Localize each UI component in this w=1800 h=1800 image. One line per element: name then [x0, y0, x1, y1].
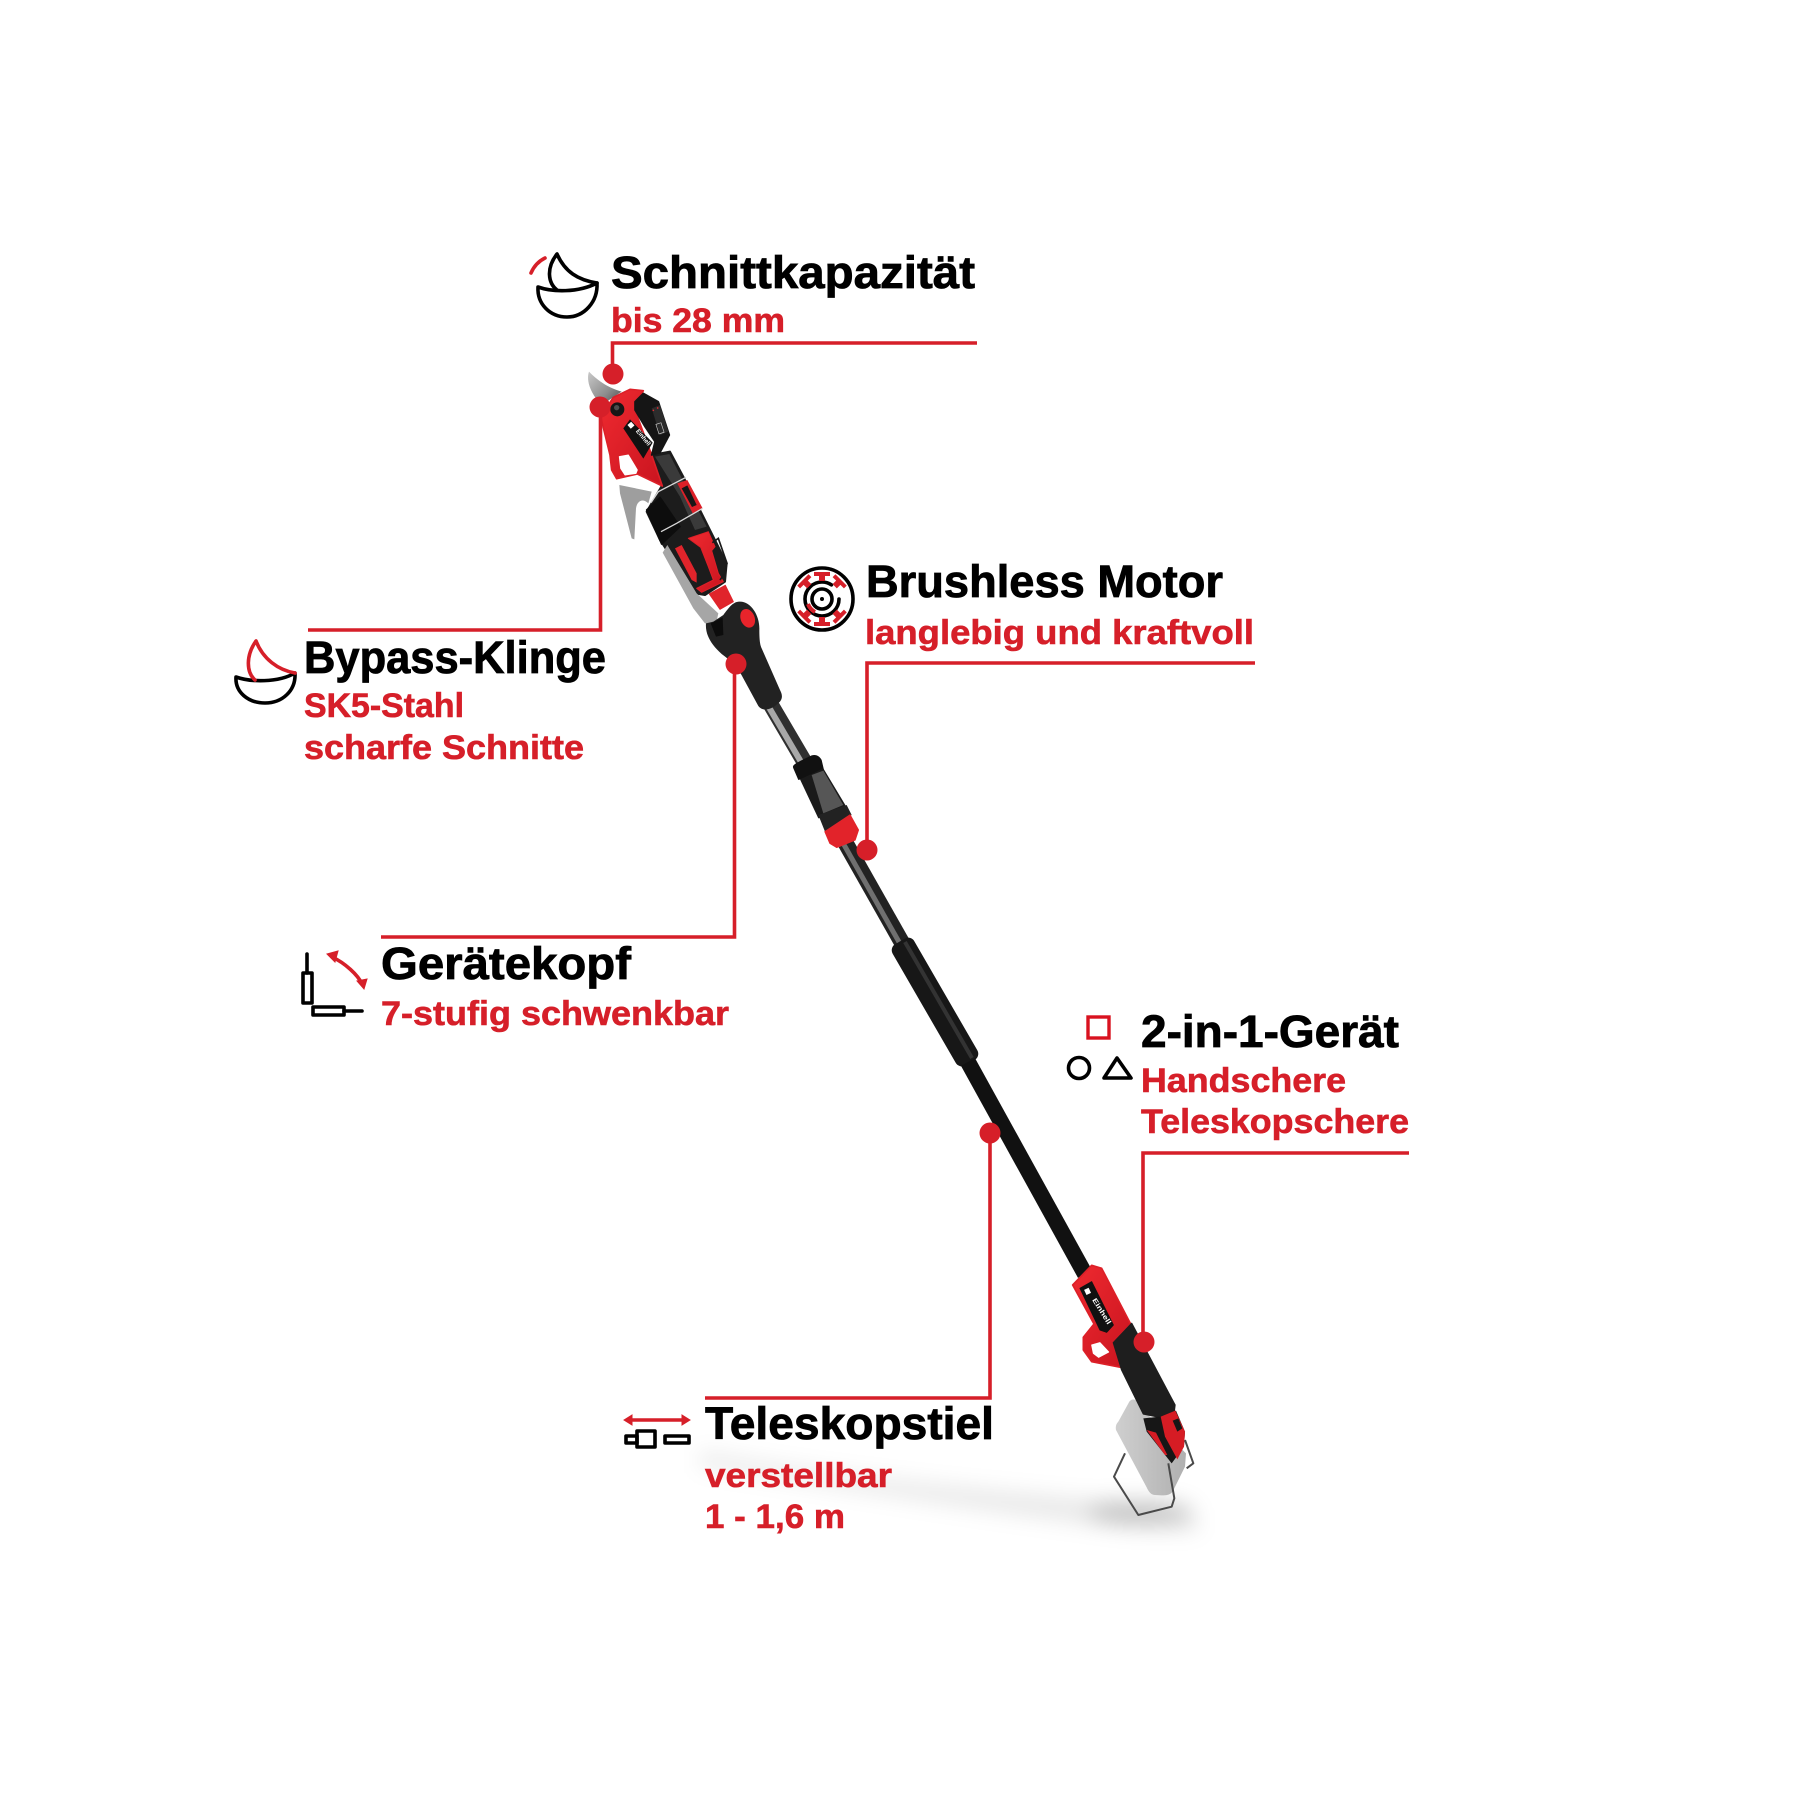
leader line: [381, 664, 734, 937]
handle opening: [1092, 1343, 1109, 1357]
heading: 2-in-1-Gerät: [1141, 1006, 1399, 1057]
subheading: langlebig und kraftvoll: [865, 614, 1254, 652]
ground shadow: [700, 1452, 1200, 1531]
handle unit: [1073, 1265, 1193, 1515]
callout: Brushless Motor: [791, 556, 1255, 860]
marker: [856, 840, 878, 860]
red stripe: [675, 545, 697, 583]
red connector: [709, 585, 733, 609]
red housing: [601, 389, 662, 486]
small display: [1173, 1418, 1182, 1432]
marker: [726, 654, 746, 674]
telescope collar cap: [793, 755, 824, 780]
rubber grip: [1113, 1323, 1175, 1417]
lower black band: [647, 497, 680, 544]
pivot bolt: [610, 402, 624, 416]
marker: [602, 364, 624, 384]
swivel joint: [706, 602, 782, 709]
knurled grip: [812, 771, 843, 813]
heading: Schnittkapazität: [611, 247, 975, 298]
leader line: [867, 663, 1255, 850]
logo panel: Einhell: [634, 428, 652, 448]
heading: Bypass-Klinge: [304, 632, 606, 683]
red lower housing: [688, 532, 723, 592]
callout: Gerätekopf: [303, 654, 746, 1033]
icon: bypass blade: [236, 641, 295, 703]
callout: Schnittkapazität: [531, 247, 977, 384]
hook blade: [619, 485, 652, 539]
blade: [588, 372, 622, 405]
icon: telescopic length: [624, 1415, 690, 1447]
wire stand: [1114, 1440, 1193, 1515]
display: [652, 405, 668, 435]
collar body: [800, 768, 848, 818]
icon: shapes: [1068, 1017, 1131, 1078]
telescopic pole lower section: [968, 1062, 1085, 1274]
collar base: [818, 805, 852, 832]
red handle housing: [1073, 1265, 1131, 1367]
subheading line 1: verstellbar: [705, 1457, 892, 1495]
subheading: 7-stufig schwenkbar: [381, 995, 729, 1033]
product: telescopic pruning shears: [588, 372, 1193, 1515]
callout: Bypass-Klinge: [236, 396, 610, 767]
heading: Brushless Motor: [866, 556, 1223, 607]
callout: Teleskopstiel: [624, 1122, 1000, 1536]
subheading: bis 28 mm: [611, 302, 785, 340]
side clip: [712, 538, 727, 580]
top control panel: [635, 393, 669, 455]
logo panel: [623, 419, 653, 459]
red locking ring: [825, 815, 858, 847]
joint shading: [711, 617, 723, 637]
lower handle logo panel: Einhell: [1090, 1297, 1112, 1326]
subheading line 2: scharfe Schnitte: [304, 729, 584, 767]
subheading line 2: 1 - 1,6 m: [705, 1498, 845, 1536]
heading: Gerätekopf: [381, 938, 632, 989]
leader line: [705, 1133, 990, 1398]
swivel joint and collar: [706, 602, 858, 847]
battery pack: [1116, 1399, 1186, 1495]
black socket base: [1143, 1411, 1185, 1463]
grey holster: [663, 545, 718, 624]
icon: motor: [791, 568, 853, 630]
telescopic pole upper section: [768, 705, 905, 949]
icon: swivel head: [303, 951, 367, 1015]
marker: [590, 396, 610, 418]
subheading line 1: Handschere: [1141, 1062, 1346, 1100]
marker: [980, 1122, 1000, 1144]
heading: Teleskopstiel: [705, 1398, 994, 1449]
socket red stripe: [1147, 1430, 1167, 1455]
trigger opening: [619, 455, 637, 475]
subheading line 1: SK5-Stahl: [304, 687, 464, 725]
red battery mount: [1161, 1411, 1185, 1459]
black grip and lower body: [647, 452, 727, 595]
foam sleeve: [889, 935, 981, 1069]
pruning head: [588, 372, 733, 624]
icon: cutting capacity: [531, 254, 597, 317]
leader line: [308, 407, 600, 630]
lower handle logo panel: [1080, 1282, 1113, 1332]
release button: [738, 607, 758, 630]
textured grip highlight: [655, 454, 707, 530]
subheading line 2: Teleskopschere: [1141, 1103, 1409, 1141]
marker: [1134, 1332, 1154, 1352]
callout: 2-in-1-Gerät: [1068, 1006, 1409, 1352]
leader line: [612, 343, 977, 374]
leader line: [1143, 1153, 1409, 1342]
strap clip: [651, 477, 703, 532]
